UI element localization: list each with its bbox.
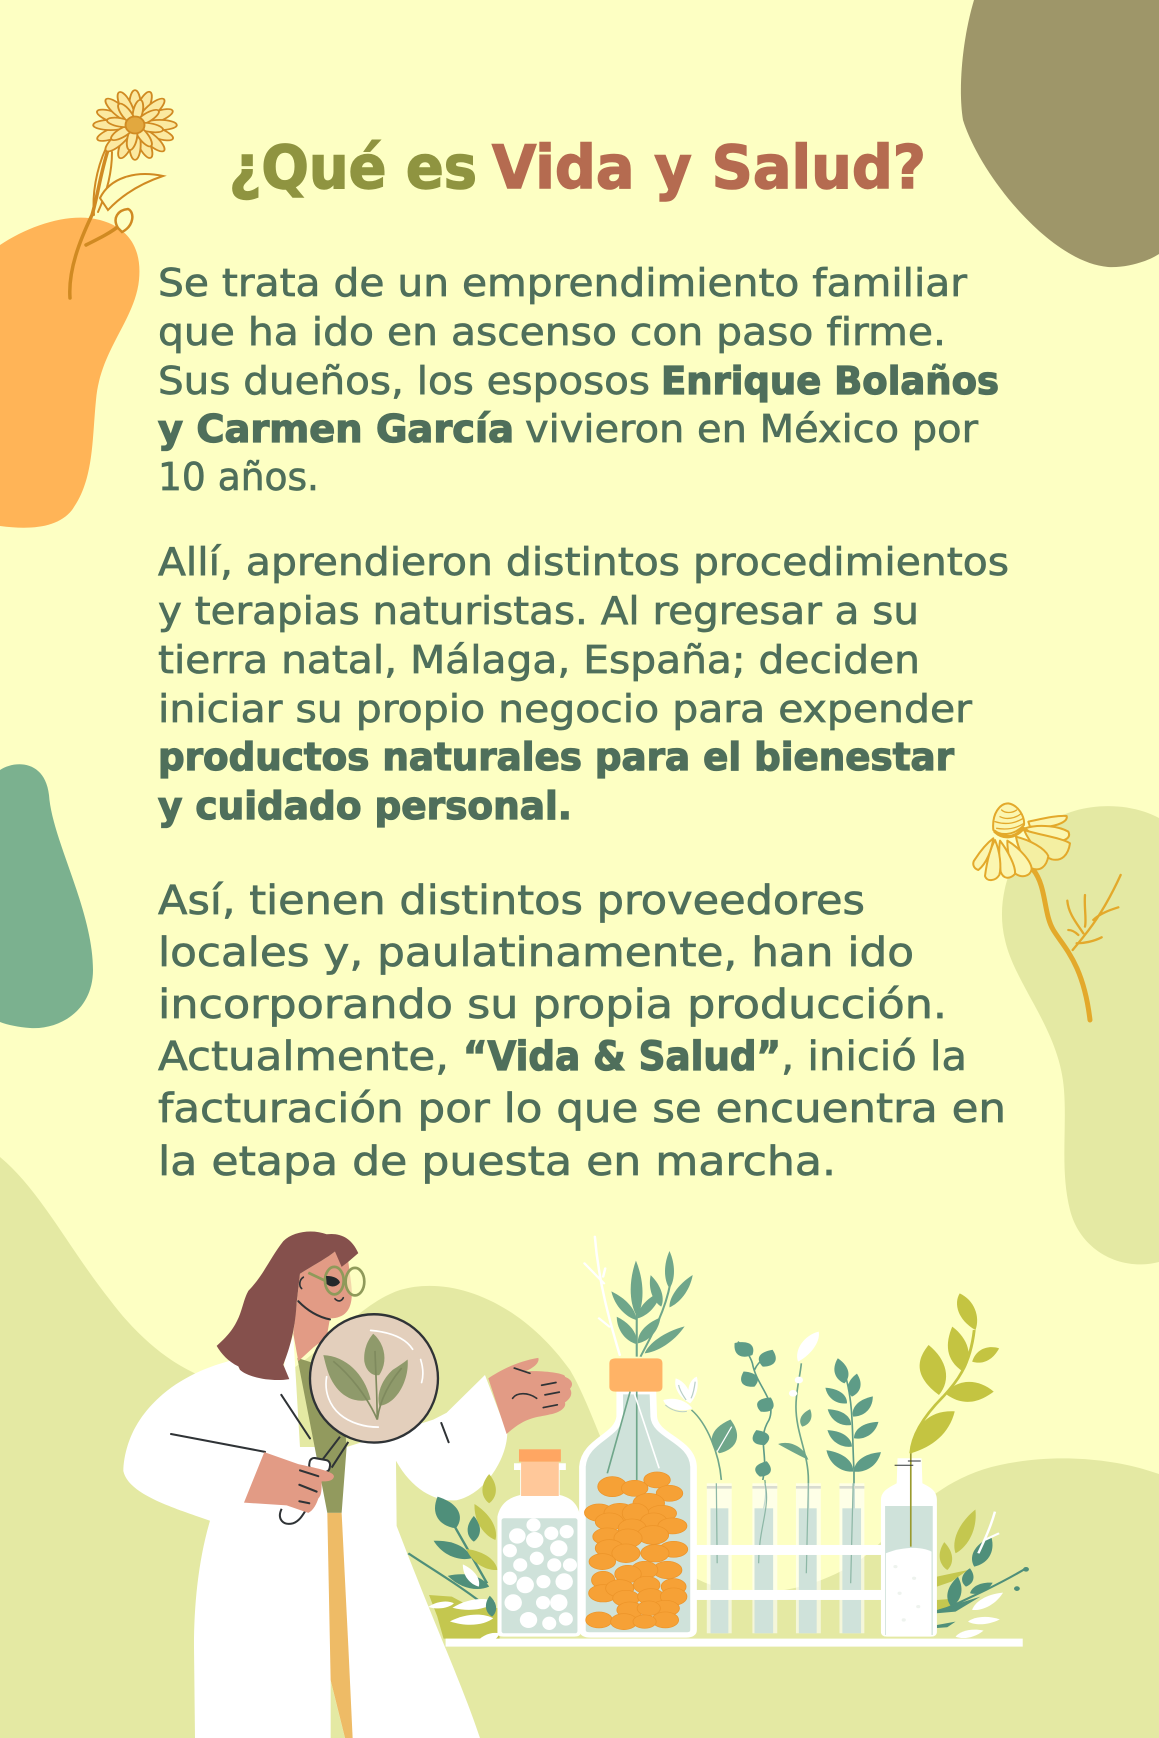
blob: olive top right xyxy=(961,0,1159,267)
right plant xyxy=(937,1507,1029,1640)
white twig xyxy=(584,1237,620,1355)
text block: paragraph 3: Actualmente, xyxy=(158,1034,449,1080)
text block: paragraph 3: , inició la xyxy=(781,1034,967,1080)
orange pills xyxy=(584,1472,688,1630)
raised hand xyxy=(488,1358,572,1434)
fern plant xyxy=(821,1357,886,1583)
right bottle xyxy=(881,1453,937,1637)
neck and face xyxy=(293,1251,352,1361)
text block: paragraph 3: locales y, paulatinamente, han ido xyxy=(158,930,914,976)
shirt xyxy=(297,1358,347,1513)
illustration: shelf with bottles and plants xyxy=(408,1237,1029,1648)
text block: paragraph 3: facturación por lo que se encuentra en xyxy=(158,1086,1006,1132)
lab coat xyxy=(123,1336,507,1738)
collar line xyxy=(298,1301,330,1319)
illustration: scientist with magnifying glass xyxy=(123,1231,572,1738)
coat lines xyxy=(171,1395,449,1452)
lime plant xyxy=(911,1293,999,1453)
text block: paragraph 3: “Vida & Salud” xyxy=(463,1034,781,1080)
blob: light green right xyxy=(1002,806,1159,1264)
text block: paragraph 3 xyxy=(158,878,1006,1185)
small bottle xyxy=(497,1449,580,1637)
title xyxy=(229,133,926,203)
text block: paragraph 1 xyxy=(158,261,999,499)
icon: yellow chamomile flower xyxy=(973,803,1121,1020)
tall white flower stem xyxy=(778,1332,819,1573)
white flower xyxy=(663,1377,742,1480)
blob: orange left xyxy=(0,218,139,528)
text block: paragraph 1: 10 años. xyxy=(158,455,319,499)
shelf xyxy=(446,1639,1023,1647)
text block: paragraph 1: Sus dueños, los esposos xyxy=(158,359,650,403)
vine plant xyxy=(729,1337,780,1553)
icon: orange line-art daisy xyxy=(70,90,177,298)
test tubes and rack xyxy=(696,1483,883,1633)
title: Vida y Salud? xyxy=(492,133,926,203)
ground hills xyxy=(0,1157,1159,1738)
text block: paragraph 1: vivieron en México por xyxy=(525,407,978,451)
text block: paragraph 1: Enrique Bolaños xyxy=(661,359,999,403)
text block: paragraph 3: incorporando su propia producción. xyxy=(158,982,947,1028)
text block: paragraph 3: Así, tienen distintos proveedores xyxy=(158,878,865,924)
magnifier handle xyxy=(322,1437,348,1468)
text block: paragraph 3: la etapa de puesta en marcha. xyxy=(158,1139,836,1185)
text block: paragraph 1: y Carmen García xyxy=(158,407,514,451)
hand xyxy=(244,1452,334,1513)
text block: paragraph 2: productos naturales para el bienestar xyxy=(158,735,954,779)
text block: paragraph 2: tierra natal, Málaga, España; deciden xyxy=(158,638,920,682)
text block: paragraph 1: que ha ido en ascenso con paso firme. xyxy=(158,310,946,354)
text block: paragraph 2: y cuidado personal. xyxy=(158,784,572,828)
top plant in large bottle xyxy=(607,1251,697,1357)
title: ¿Qué es xyxy=(229,133,477,203)
blob: green left xyxy=(0,764,93,1028)
orange tie xyxy=(327,1513,353,1738)
text block: paragraph 2: iniciar su propio negocio para expender xyxy=(158,687,972,731)
text block: paragraph 2 xyxy=(158,540,1009,828)
text block: paragraph 2: y terapias naturistas. Al regresar a su xyxy=(158,589,919,633)
hair xyxy=(217,1231,358,1380)
text block: paragraph 1: Se trata de un emprendimiento familiar xyxy=(158,261,967,305)
text block: paragraph 2: Allí, aprendieron distintos procedimientos xyxy=(158,540,1009,584)
glasses xyxy=(308,1267,364,1295)
large bottle xyxy=(582,1358,694,1635)
left plant xyxy=(408,1474,502,1648)
magnifier lens xyxy=(310,1314,438,1443)
